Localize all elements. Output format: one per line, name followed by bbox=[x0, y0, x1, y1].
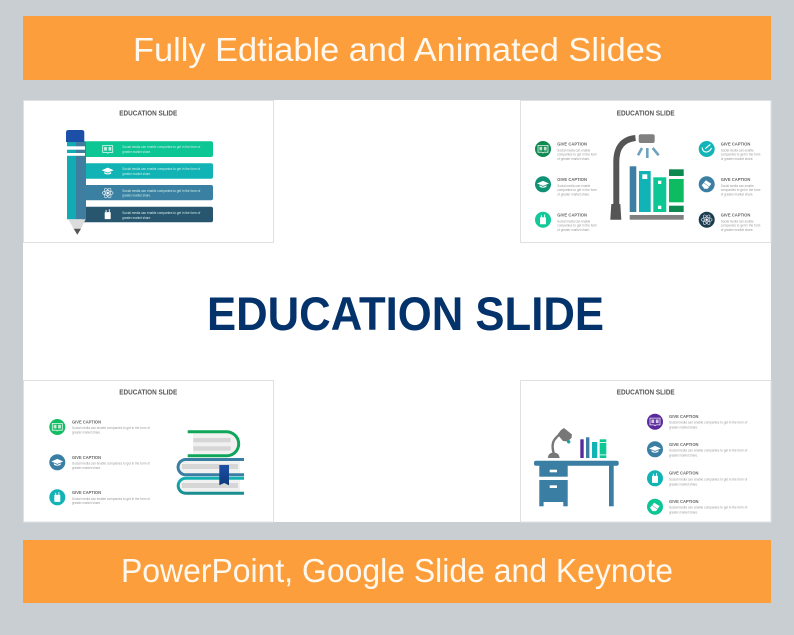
icon: books on desk bbox=[580, 437, 606, 458]
slide heading: EDUCATION SLIDE bbox=[617, 110, 675, 117]
pencil bars: greater market share. bbox=[122, 216, 151, 220]
caption list: greater market share. bbox=[669, 482, 698, 486]
top banner bbox=[23, 16, 771, 80]
caption list: greater market share. bbox=[669, 454, 698, 458]
top banner: Fully Edtiable and Animated Slides bbox=[133, 31, 662, 68]
icon: pencil bbox=[66, 130, 86, 235]
left caption column: Social media can enable bbox=[557, 184, 590, 188]
caption list: greater market share. bbox=[72, 501, 101, 505]
right caption column: GIVE CAPTION bbox=[721, 177, 751, 182]
right caption column: GIVE CAPTION bbox=[721, 212, 751, 217]
left caption column bbox=[535, 141, 597, 232]
caption list: GIVE CAPTION bbox=[72, 490, 102, 495]
right caption column: companies to get in the form bbox=[721, 153, 760, 157]
panel: stacked books slide bbox=[24, 380, 274, 522]
caption list: greater market share. bbox=[72, 466, 101, 470]
caption list: GIVE CAPTION bbox=[669, 499, 699, 504]
panel: lamp and books slide bbox=[520, 100, 771, 242]
caption list: Social media can enable companies to get in the form of bbox=[72, 497, 150, 501]
panel: desk slide bbox=[520, 380, 771, 522]
right caption column: of greater market share. bbox=[721, 228, 753, 232]
right caption column: companies to get in the form bbox=[721, 188, 760, 192]
left caption column: companies to get in the form bbox=[557, 153, 597, 157]
caption list: GIVE CAPTION bbox=[72, 455, 102, 460]
caption list: Social media can enable companies to get in the form of bbox=[669, 449, 747, 453]
caption list: GIVE CAPTION bbox=[669, 414, 699, 419]
left caption column: of greater market share. bbox=[557, 192, 590, 196]
left caption column: of greater market share. bbox=[557, 157, 590, 161]
right caption column: companies to get in the form bbox=[721, 224, 760, 228]
right caption column: of greater market share. bbox=[721, 157, 753, 161]
right caption column: Social media can enable bbox=[721, 219, 754, 223]
caption list: GIVE CAPTION bbox=[669, 442, 699, 447]
caption list: greater market share. bbox=[669, 426, 698, 430]
left caption column: of greater market share. bbox=[557, 228, 590, 232]
slide heading: EDUCATION SLIDE bbox=[119, 110, 178, 117]
caption list: Social media can enable companies to get in the form of bbox=[669, 421, 747, 425]
left caption column: companies to get in the form bbox=[557, 188, 597, 192]
pencil bars: Social media can enable companies to get in the form of bbox=[122, 145, 200, 149]
left caption column: GIVE CAPTION bbox=[557, 141, 588, 146]
caption list: GIVE CAPTION bbox=[72, 419, 102, 424]
right caption column: of greater market share. bbox=[721, 192, 753, 196]
pencil bars: Social media can enable companies to get in the form of bbox=[122, 167, 200, 171]
pencil bars: greater market share. bbox=[122, 194, 151, 198]
icon: desk lamp bbox=[548, 428, 572, 458]
slide heading: EDUCATION SLIDE bbox=[119, 390, 178, 397]
left caption column: GIVE CAPTION bbox=[557, 212, 588, 217]
caption list: Social media can enable companies to get in the form of bbox=[72, 426, 150, 430]
icon: stack of books bbox=[177, 430, 244, 495]
caption list: Social media can enable companies to get in the form of bbox=[669, 506, 747, 510]
left caption column: companies to get in the form bbox=[557, 224, 597, 228]
left caption column: GIVE CAPTION bbox=[557, 177, 588, 182]
caption list: greater market share. bbox=[72, 430, 101, 434]
left caption column: Social media can enable bbox=[557, 148, 590, 152]
left caption column: Social media can enable bbox=[557, 219, 590, 223]
icon: street lamp bbox=[610, 134, 659, 220]
right caption column: GIVE CAPTION bbox=[721, 141, 751, 146]
right caption column: Social media can enable bbox=[721, 148, 754, 152]
pencil bars: greater market share. bbox=[122, 172, 151, 176]
pencil bars: greater market share. bbox=[122, 150, 151, 154]
bottom banner bbox=[23, 540, 771, 603]
caption list bbox=[647, 414, 747, 515]
pencil bars: Social media can enable companies to get in the form of bbox=[122, 211, 200, 215]
bottom banner: PowerPoint, Google Slide and Keynote bbox=[121, 552, 673, 589]
white central panel bbox=[23, 100, 771, 522]
caption list: GIVE CAPTION bbox=[669, 471, 699, 476]
pencil bars bbox=[82, 141, 213, 222]
right caption column bbox=[699, 141, 760, 232]
main title: EDUCATION SLIDE bbox=[207, 288, 604, 341]
icon: books on shelf bbox=[630, 166, 684, 220]
slide heading: EDUCATION SLIDE bbox=[617, 390, 675, 397]
pencil bars: Social media can enable companies to get in the form of bbox=[122, 189, 200, 193]
caption list: Social media can enable companies to get in the form of bbox=[72, 462, 150, 466]
caption list bbox=[49, 419, 150, 505]
caption list: greater market share. bbox=[669, 511, 698, 515]
panel: pencil slide bbox=[24, 100, 274, 242]
icon: desk bbox=[534, 461, 619, 506]
caption list: Social media can enable companies to get in the form of bbox=[669, 477, 747, 481]
right caption column: Social media can enable bbox=[721, 184, 754, 188]
